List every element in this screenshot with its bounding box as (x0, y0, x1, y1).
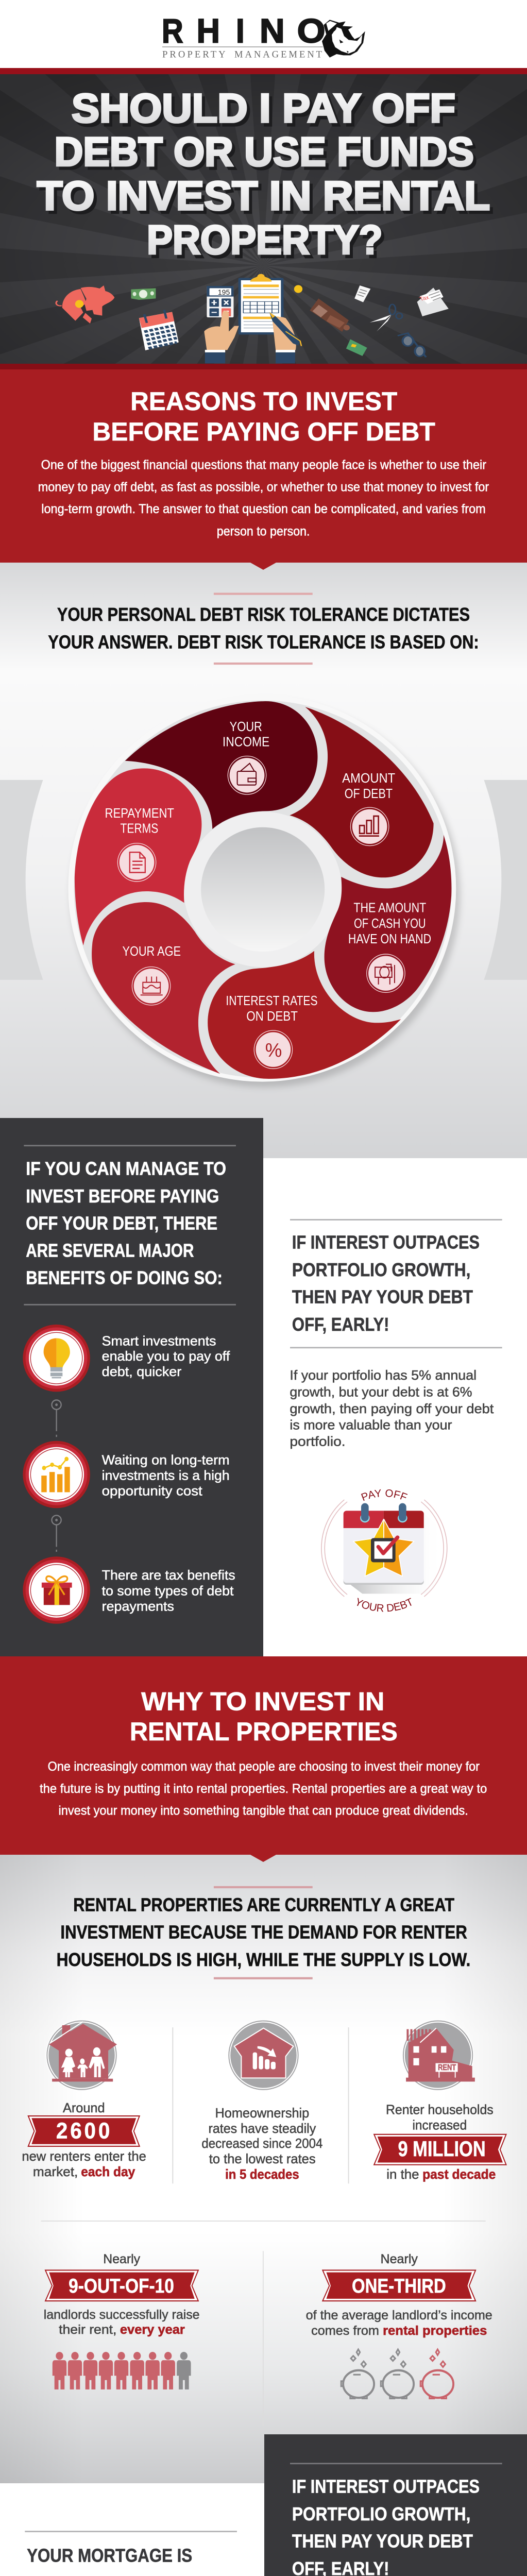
icon: family house (47, 2021, 117, 2090)
stats row two (41, 2221, 492, 2426)
panel: mortgage layer of debt (0, 2483, 264, 2576)
heading: reasons to invest: BEFORE PAYING OFF DEBT (92, 418, 435, 447)
text: portfolio example: portfolio. (290, 1434, 346, 1449)
icon: calculator (207, 286, 233, 317)
panel: reasons to invest intro (0, 369, 527, 563)
heading: mortgage (27, 2546, 241, 2576)
icon: tax envelope: Tax (418, 294, 430, 302)
icon: gold coin (294, 285, 302, 293)
stat: one third of income: comes from (311, 2324, 379, 2338)
connector (52, 1515, 61, 1552)
heading: debt risk tolerance: YOUR ANSWER. DEBT RISK TOLERANCE IS BASED ON: (48, 632, 479, 653)
heading: debt risk tolerance: YOUR PERSONAL DEBT RISK TOLERANCE DICTATES (57, 605, 470, 625)
benefit: long-term investments: opportunity cost (102, 1484, 202, 1499)
text: portfolio example: is more valuable than your (290, 1418, 452, 1433)
heading: concerns: IF INTEREST OUTPACES (292, 2477, 480, 2497)
heading: interest outpaces: PORTFOLIO GROWTH, (292, 1260, 470, 1280)
stat: 2600 new renters: market, (33, 2164, 78, 2179)
benefit: tax benefits: to some types of debt (102, 1584, 233, 1599)
stat: homeownership rates: rates have steadily (208, 2121, 316, 2136)
segment: interest rates on debt: % (265, 1039, 282, 1061)
title: SHOULD I PAY OFF (72, 86, 455, 131)
heading: interest outpaces: IF INTEREST OUTPACES (292, 1233, 480, 1253)
logo: header: R (162, 12, 183, 50)
text: rental intro paragraph: the future is by putting it into rental properties. Rental properties are a great way to (40, 1782, 487, 1796)
benefit: smart investments: Smart investments (102, 1334, 216, 1349)
heading: why to invest (130, 1687, 398, 1747)
segment: amount of cash on hand: THE AMOUNT (353, 901, 426, 916)
logo: header: MANAGEMENT (234, 49, 322, 60)
stat: 9 million renter households: increased (412, 2118, 467, 2133)
logo: header: I (236, 12, 245, 50)
ribbon: one-third (322, 2270, 475, 2301)
heading: rental demand (57, 1886, 470, 1979)
stat: 9 out of 10 landlords: every year (120, 2323, 185, 2337)
logo: header: N (260, 12, 285, 50)
icon: glasses (398, 333, 426, 357)
stat: 2600 new renters: new renters enter the (22, 2149, 146, 2164)
ribbon: 9-out-of-10 (45, 2270, 198, 2301)
icon: pay off your debt calendar: PAY OFF (361, 1489, 408, 1501)
segment: repayment terms: REPAYMENT (105, 806, 174, 821)
segment: your age: YOUR AGE (122, 944, 181, 959)
text: portfolio example (290, 1368, 494, 1449)
stat: homeownership rates: Homeownership (215, 2106, 309, 2121)
icon: right hand with pen (269, 312, 301, 363)
stat: homeownership rates: decreased since 2004 (201, 2136, 322, 2151)
stat: 2600 new renters: Around (63, 2100, 105, 2115)
stat: 9 million renter households: in the (386, 2167, 419, 2182)
icon: rental building: RENT (438, 2064, 456, 2072)
segment: your age (92, 902, 235, 1074)
stat: 9 million renter households: past decade (422, 2167, 496, 2182)
segment: amount of cash on hand: HAVE ON HAND (348, 931, 431, 946)
heading: rental demand: INVESTMENT BECAUSE THE DEMAND FOR RENTER (60, 1923, 467, 1943)
heading: benefits (26, 1159, 226, 1289)
benefit: tax benefits (23, 1556, 235, 1624)
icon: scissors (370, 304, 402, 331)
text: intro paragraph (38, 459, 489, 539)
heading: interest outpaces: OFF, EARLY! (292, 1315, 389, 1335)
heading: reasons to invest: REASONS TO INVEST (130, 387, 397, 416)
heading: why to invest: RENTAL PROPERTIES (130, 1718, 398, 1747)
title: PROPERTY? (147, 217, 382, 263)
icon: calculator: 195 (218, 289, 230, 296)
benefit: tax benefits: repayments (102, 1599, 174, 1614)
title: DEBT OR USE FUNDS (58, 132, 477, 178)
stat: 9 million renter households (374, 2021, 506, 2182)
panel: why to invest in rental properties (0, 1656, 527, 1855)
title: TO INVEST IN RENTAL (37, 173, 490, 218)
title: DEBT OR USE FUNDS (55, 129, 474, 175)
text: rental intro paragraph (40, 1760, 487, 1818)
stat: homeownership rates: in 5 decades (225, 2167, 299, 2182)
stat: one third of income: of the average landlord’s income (306, 2309, 492, 2323)
icon: nine of ten people (53, 2352, 191, 2389)
text: intro paragraph: person to person. (217, 525, 310, 539)
icon: falling house chart (229, 2021, 298, 2090)
icon: wall calendar (139, 310, 179, 350)
panel: debt risk tolerance background (0, 563, 527, 1158)
icon: three piggy banks (341, 2349, 453, 2398)
title: TO INVEST IN RENTAL (40, 177, 493, 222)
segment: your income (125, 701, 318, 829)
title (37, 86, 493, 266)
heading: concerns (292, 2477, 480, 2576)
benefit: long-term investments: investments is a high (102, 1468, 230, 1483)
heading: benefits: ARE SEVERAL MAJOR (26, 1241, 194, 1261)
stat: 9 million renter households: Renter households (386, 2103, 494, 2117)
stat: 2600 new renters (22, 2021, 146, 2179)
ribbon: one-third: ONE-THIRD (352, 2275, 446, 2297)
panel: hero band (0, 68, 527, 369)
heading: benefits: OFF YOUR DEBT, THERE (26, 1213, 217, 1234)
text: portfolio example: growth, then paying off your debt (290, 1401, 494, 1416)
logo: header: H (197, 12, 220, 50)
chart: debt risk tolerance pinwheel (68, 695, 461, 1087)
connector (52, 1400, 61, 1437)
benefit: smart investments (23, 1325, 230, 1392)
icon: broken piggy bank (56, 285, 114, 324)
stat: one third of income: rental properties (383, 2324, 487, 2338)
segment: amount of debt: OF DEBT (345, 786, 393, 801)
logo: header (162, 12, 365, 60)
heading: rental demand: HOUSEHOLDS IS HIGH, WHILE THE SUPPLY IS LOW. (57, 1950, 470, 1970)
icon: left hand (204, 311, 239, 363)
text: portfolio example: growth, but your debt is at 6% (290, 1385, 472, 1400)
icon: wallet (310, 298, 350, 332)
ribbon: 2600: 2600 (56, 2118, 110, 2143)
benefit: smart investments: debt, quicker (102, 1364, 181, 1379)
heading: rental demand: RENTAL PROPERTIES ARE CURRENTLY A GREAT (73, 1895, 454, 1916)
segment: your income: YOUR (230, 719, 262, 734)
illustration: finance desk icons (56, 274, 449, 363)
text: intro paragraph: One of the biggest financial questions that many people face is whether to use their (41, 459, 486, 472)
heading: mortgage: YOUR MORTGAGE IS (27, 2546, 192, 2566)
segment: interest rates on debt: INTEREST RATES (226, 993, 318, 1008)
benefit: smart investments: enable you to pay off (102, 1349, 230, 1364)
stat: 9 out of 10 landlords: landlords successfully raise (44, 2308, 200, 2322)
text: rental intro paragraph: invest your money into something tangible that can produce great dividends. (59, 1804, 468, 1818)
icon: pay off your debt calendar (321, 1489, 448, 1612)
segment: amount of debt (290, 707, 434, 877)
stat: homeownership rates (201, 2021, 322, 2182)
text: intro paragraph: money to pay off debt, as fast as possible, or whether to use that money to invest for (38, 481, 489, 495)
stat: homeownership rates: to the lowest rates (209, 2151, 316, 2166)
heading: concerns: THEN PAY YOUR DEBT (292, 2531, 473, 2552)
segment: your income: INCOME (223, 735, 269, 750)
panel: benefits of investing (0, 1118, 263, 1656)
segment: amount of cash on hand: OF CASH YOU (354, 916, 426, 931)
segment: interest rates on debt: ON DEBT (246, 1009, 298, 1024)
segment: repayment terms (75, 768, 201, 945)
ribbon: 2600 (28, 2116, 140, 2146)
heading: interest outpaces (292, 1233, 480, 1335)
stats row (22, 2021, 506, 2183)
heading: reasons to invest (92, 387, 435, 447)
icon: tax envelope (417, 287, 449, 316)
stat: 2600 new renters: each day (81, 2164, 135, 2179)
segment: amount of cash on hand (325, 835, 451, 1012)
segment: repayment terms: TERMS (121, 821, 158, 836)
stat: one third of income: Nearly (381, 2252, 418, 2266)
heading: benefits: IF YOU CAN MANAGE TO (26, 1159, 226, 1179)
heading: debt risk tolerance (48, 593, 479, 665)
stat: 9 out of 10 landlords: their rent, (59, 2323, 116, 2337)
title: SHOULD I PAY OFF (75, 89, 458, 134)
benefit: long-term investments: Waiting on long-term (102, 1453, 230, 1468)
stat: 9 out of 10 landlords (44, 2252, 200, 2389)
benefit: long-term investments (23, 1441, 230, 1508)
text: rental intro paragraph: One increasingly common way that people are choosing to invest their money for (48, 1760, 480, 1774)
ribbon: 9 million: 9 MILLION (398, 2137, 486, 2161)
icon: credit card (346, 339, 367, 356)
heading: benefits: INVEST BEFORE PAYING (26, 1187, 219, 1207)
icon: rental building (403, 2021, 475, 2090)
heading: why to invest: WHY TO INVEST IN (141, 1687, 384, 1716)
segment: amount of debt: AMOUNT (342, 771, 395, 786)
logo: header: O (297, 12, 326, 50)
icon: banknote (131, 288, 156, 300)
stat: 9 out of 10 landlords: Nearly (103, 2252, 140, 2266)
heading: benefits: BENEFITS OF DOING SO: (26, 1268, 223, 1289)
panel: rental stats background (0, 1855, 527, 2483)
icon: receipt (354, 285, 370, 302)
title: PROPERTY? (150, 221, 385, 266)
benefit: tax benefits: There are tax benefits (102, 1568, 235, 1583)
panel: landlord concerns (264, 2434, 527, 2576)
panel: interest outpaces portfolio growth (290, 1219, 502, 1612)
ribbon: 9 million (374, 2134, 506, 2165)
logo: header: PROPERTY (162, 49, 226, 60)
heading: interest outpaces: THEN PAY YOUR DEBT (292, 1287, 473, 1308)
ribbon: 9-out-of-10: 9-OUT-OF-10 (69, 2275, 174, 2297)
heading: concerns: PORTFOLIO GROWTH, (292, 2504, 470, 2524)
segment: interest rates on debt (208, 951, 401, 1079)
icon: clipboard (239, 274, 283, 334)
text: portfolio example: If your portfolio has 5% annual (290, 1368, 477, 1383)
text: intro paragraph: long-term growth. The answer to that question can be complicated, and varies from (41, 502, 486, 516)
stat: one third of income (306, 2252, 492, 2398)
icon: pay off your debt calendar: YOUR DEBT (357, 1598, 412, 1612)
